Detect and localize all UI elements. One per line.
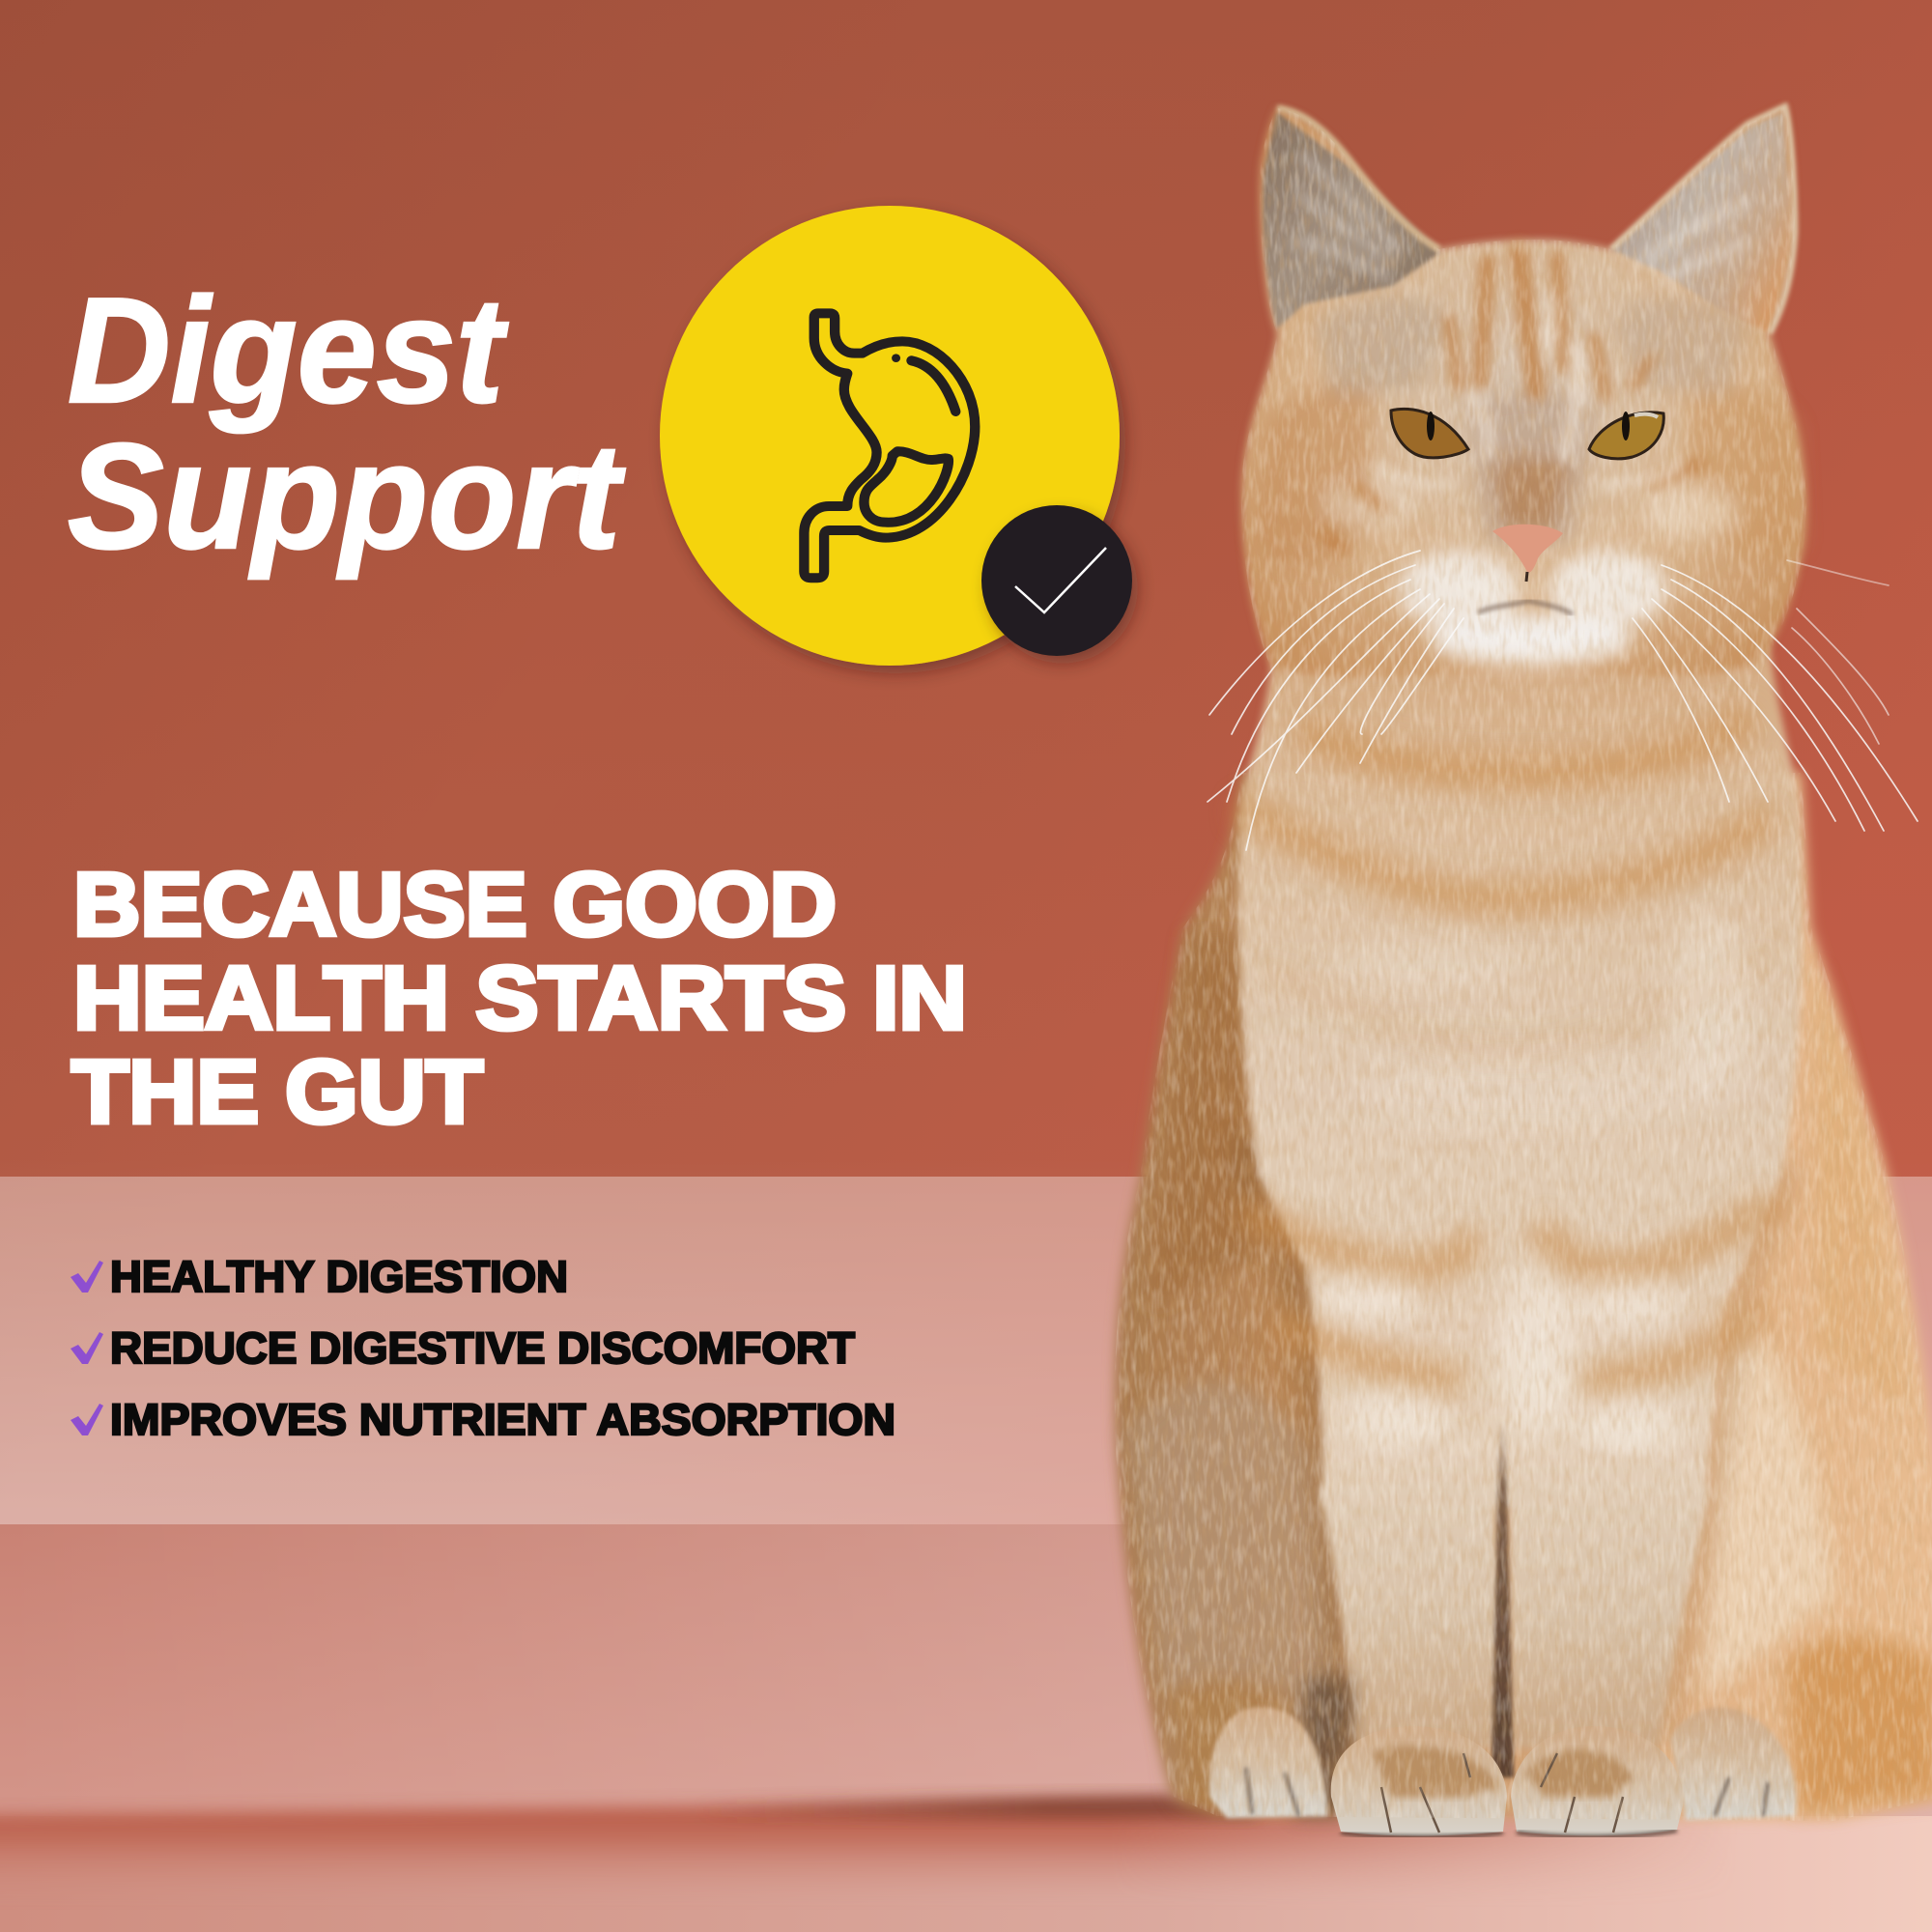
icon: yellow circle with stomach: [660, 206, 1120, 666]
icon: black check badge: [981, 505, 1132, 656]
front left paw: [1331, 1726, 1507, 1837]
cat body and haunches: [1115, 773, 1932, 1821]
item: reduce digestive discomfort: REDUCE DIGESTIVE DISCOMFORT: [110, 1323, 855, 1373]
left ear: [1263, 108, 1439, 328]
title: Digest Support: Digest: [68, 267, 508, 434]
mouth: [1478, 601, 1573, 614]
outer right paw: [1670, 1707, 1796, 1820]
left eye: [1391, 409, 1468, 458]
heading: because good health starts in the gut: BECAUSE GOOD: [73, 854, 837, 954]
nose: [1492, 525, 1563, 582]
forehead pale markings: [1377, 299, 1679, 485]
fur texture: [1101, 97, 1932, 1835]
forehead stripes: [1323, 251, 1700, 551]
haunch shadow beside chest and legs: [1251, 1150, 1787, 1729]
heading: because good health starts in the gut: HEALTH STARTS IN: [73, 948, 967, 1048]
translucent band behind checklist: [0, 1177, 1932, 1524]
outer left paw: [1209, 1707, 1327, 1818]
item: healthy digestion: HEALTHY DIGESTION: [110, 1252, 568, 1301]
chest pale patches: [1317, 908, 1752, 1454]
title: Digest Support: [68, 267, 625, 580]
dark shadow beside left leg: [1294, 1674, 1354, 1816]
front right paw: [1511, 1726, 1684, 1836]
icon: stomach: [804, 313, 975, 578]
heading: because good health starts in the gut: THE GUT: [71, 1041, 483, 1142]
left whiskers: [1208, 551, 1463, 850]
title: Digest Support: Support: [68, 412, 625, 580]
cat body shading: [1125, 937, 1932, 1811]
cat chest and neck: [1238, 599, 1803, 1507]
dark gap between front legs: [1492, 1420, 1514, 1777]
right front leg: [1510, 1439, 1708, 1748]
cat head: [1241, 106, 1806, 678]
white muzzle and chin: [1399, 551, 1668, 665]
chest orange stripes: [1252, 724, 1768, 1381]
checklist: [71, 1252, 895, 1444]
right ear: [1611, 106, 1795, 333]
item: improves nutrient absorption: IMPROVES NUTRIENT ABSORPTION: [110, 1395, 895, 1444]
right whiskers: [1633, 560, 1918, 831]
face shading and markings: [1256, 298, 1802, 568]
heading: because good health starts in the gut: [71, 854, 967, 1142]
right eye: [1589, 412, 1663, 459]
cat photo illustration: [1101, 97, 1932, 1837]
left front leg: [1320, 1439, 1505, 1748]
